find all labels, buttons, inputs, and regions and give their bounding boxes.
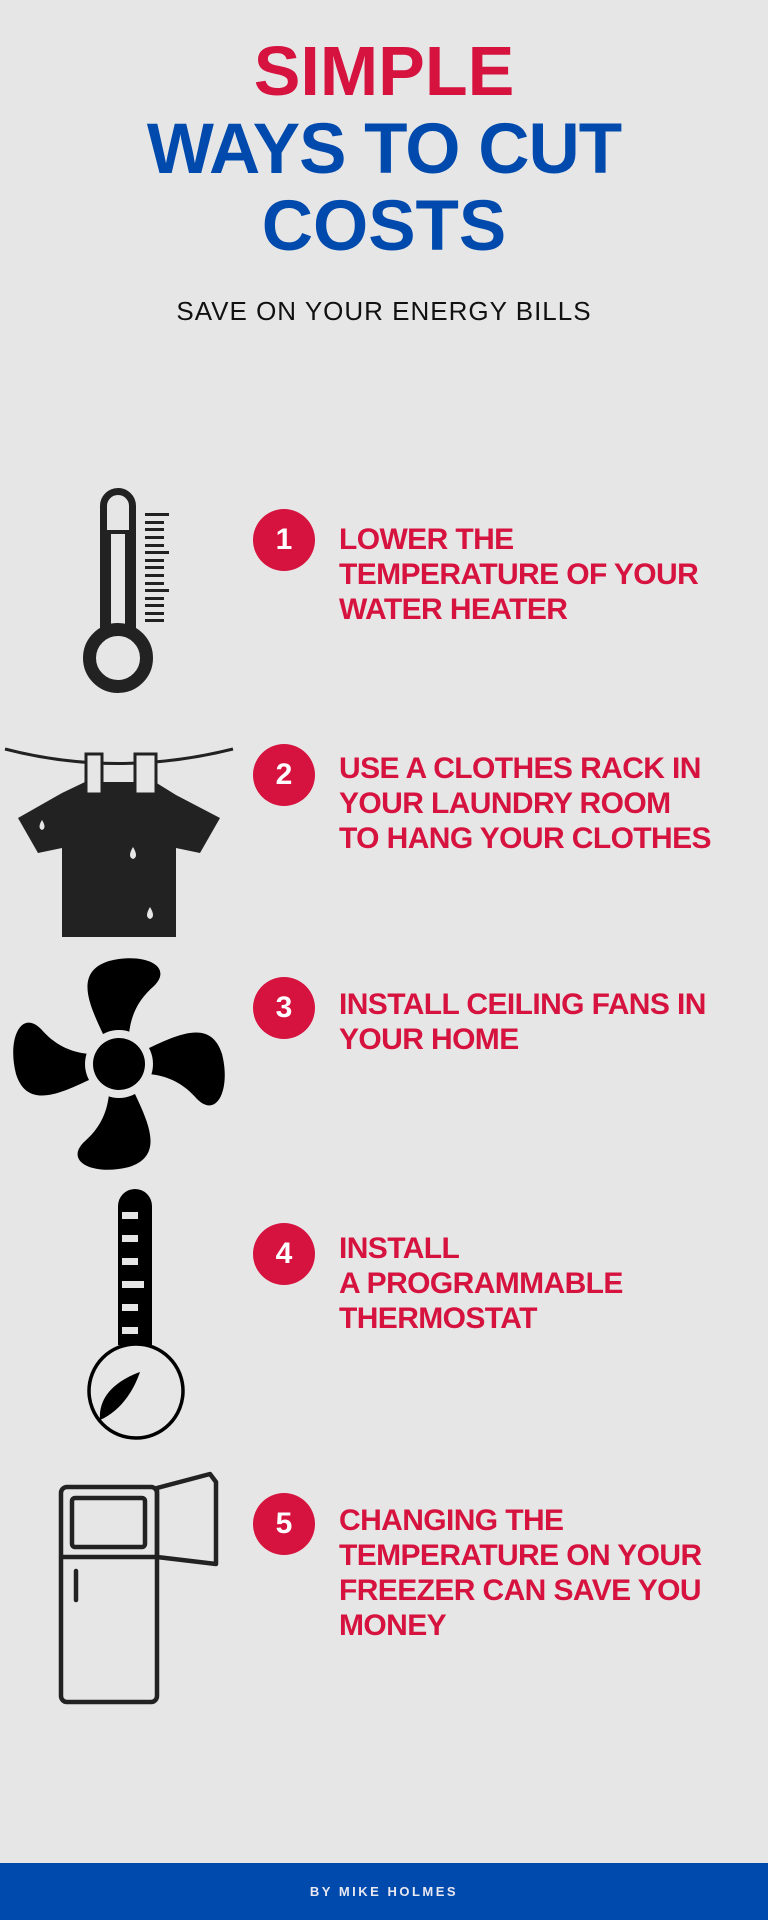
number badge 3 xyxy=(253,977,315,1039)
step 4 xyxy=(253,1223,623,1335)
step 1 xyxy=(253,509,698,626)
footer: BY MIKE HOLMES xyxy=(310,1884,458,1899)
icon: thermostat thermometer xyxy=(87,1189,185,1440)
step 5 text xyxy=(339,1504,702,1642)
step 5 xyxy=(253,1493,702,1642)
icon: thermometer xyxy=(83,488,169,693)
step 2 text xyxy=(339,752,711,855)
step 1 text: LOWER THE xyxy=(339,523,514,556)
step 4 text: THERMOSTAT xyxy=(339,1302,537,1335)
step 3 text: YOUR HOME xyxy=(339,1023,519,1056)
title line: simple: SIMPLE xyxy=(254,32,514,110)
number badge 1: 1 xyxy=(276,523,292,556)
step 4 text: INSTALL xyxy=(339,1232,459,1265)
subtitle: SAVE ON YOUR ENERGY BILLS xyxy=(176,296,592,326)
step 4 text xyxy=(339,1232,623,1335)
icon: fridge xyxy=(58,1472,218,1704)
step 2 text: YOUR LAUNDRY ROOM xyxy=(339,787,670,820)
number badge 3: 3 xyxy=(276,991,292,1024)
step 1 text xyxy=(339,523,698,626)
number badge 4: 4 xyxy=(276,1237,292,1270)
step 5 text: TEMPERATURE ON YOUR xyxy=(339,1539,702,1572)
number badge 2: 2 xyxy=(276,758,292,791)
footer xyxy=(0,1863,768,1920)
step 2 xyxy=(253,744,711,855)
step 5 text: MONEY xyxy=(339,1609,446,1642)
title xyxy=(147,32,622,266)
number badge 2 xyxy=(253,744,315,806)
icon: shirt on clothesline xyxy=(4,748,234,937)
number badge 5: 5 xyxy=(276,1507,292,1540)
number badge 1 xyxy=(253,509,315,571)
number badge 5 xyxy=(253,1493,315,1555)
step 2 text: USE A CLOTHES RACK IN xyxy=(339,752,701,785)
step 3 xyxy=(253,977,706,1056)
title line: ways to cut: WAYS TO CUT xyxy=(147,110,621,189)
icon: fan xyxy=(13,958,225,1170)
step 3 text: INSTALL CEILING FANS IN xyxy=(339,988,706,1021)
step 3 text xyxy=(339,988,706,1056)
number badge 4 xyxy=(253,1223,315,1285)
step 1 text: WATER HEATER xyxy=(339,593,567,626)
step 2 text: TO HANG YOUR CLOTHES xyxy=(339,822,711,855)
step 4 text: A PROGRAMMABLE xyxy=(339,1267,623,1300)
step 5 text: CHANGING THE xyxy=(339,1504,563,1537)
step 5 text: FREEZER CAN SAVE YOU xyxy=(339,1574,701,1607)
title line: costs: COSTS xyxy=(262,187,506,266)
step 1 text: TEMPERATURE OF YOUR xyxy=(339,558,698,591)
